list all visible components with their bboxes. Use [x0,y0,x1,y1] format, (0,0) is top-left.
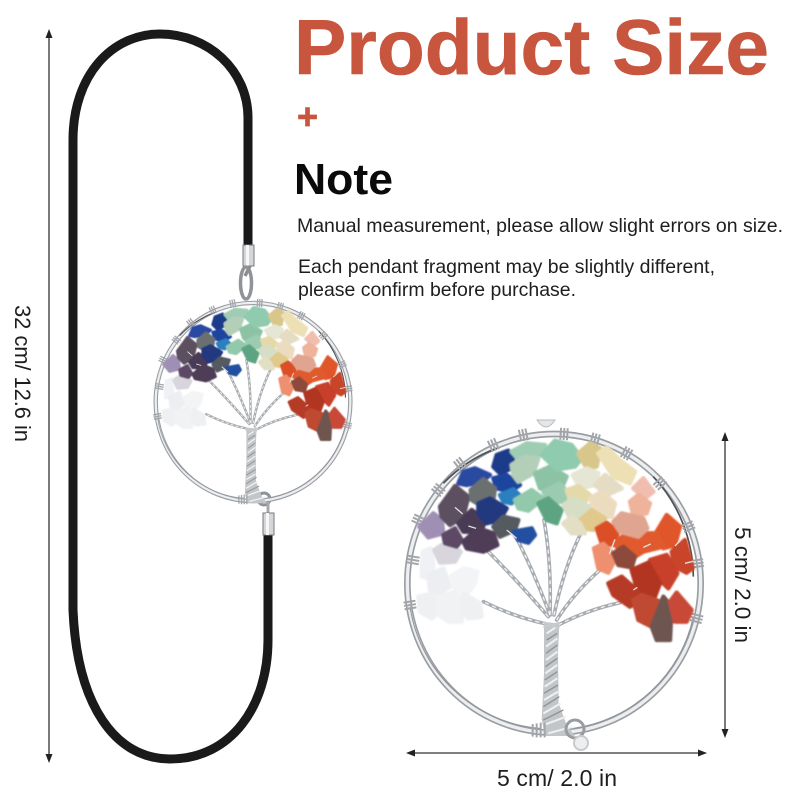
gemstones [418,441,693,640]
ring frame [407,434,701,733]
black cord: upper section [73,34,248,300]
lapis chips [458,451,535,543]
black cord: lower section [73,300,268,759]
bail stub above large pendant [537,420,555,427]
label: pendant width: 5 cm/ 2.0 in [497,765,617,791]
wire pins over stones [455,507,693,590]
large tree of life pendant [404,428,704,737]
small tree of life pendant on necklace [153,299,353,504]
height arrow: necklace length [46,29,52,763]
plus sign: + [297,96,318,137]
note text: manual measurement: Manual measurement, please allow slight errors on size. [297,215,783,237]
label: pendant height: 5 cm/ 2.0 in [730,527,755,643]
wire wraps [404,428,704,623]
width arrow: pendant [406,750,707,756]
note text: pendant fragment difference: please confirm before purchase. [298,279,576,301]
amethyst chips [419,486,497,563]
twisted branches [483,520,620,625]
note text: pendant fragment difference: Each pendant fragment may be slightly different, [298,256,715,278]
aventurine chips [512,441,582,523]
bottom clasp and loop [258,493,274,535]
title: Product Size: Product Size [294,3,769,91]
citrine chips [563,443,635,533]
height arrow: pendant [722,432,728,738]
label: necklace length: 32 cm/ 12.6 in [10,305,35,442]
clear quartz [418,548,482,622]
red jasper chips [608,555,692,640]
top clasp and bail [240,245,254,299]
jump ring on large pendant [566,720,588,750]
twisted trunk [533,622,575,737]
heading: Note: Note [294,155,393,204]
note text: pendant fragment difference [298,256,715,301]
pink and carnelian chips [594,478,693,573]
